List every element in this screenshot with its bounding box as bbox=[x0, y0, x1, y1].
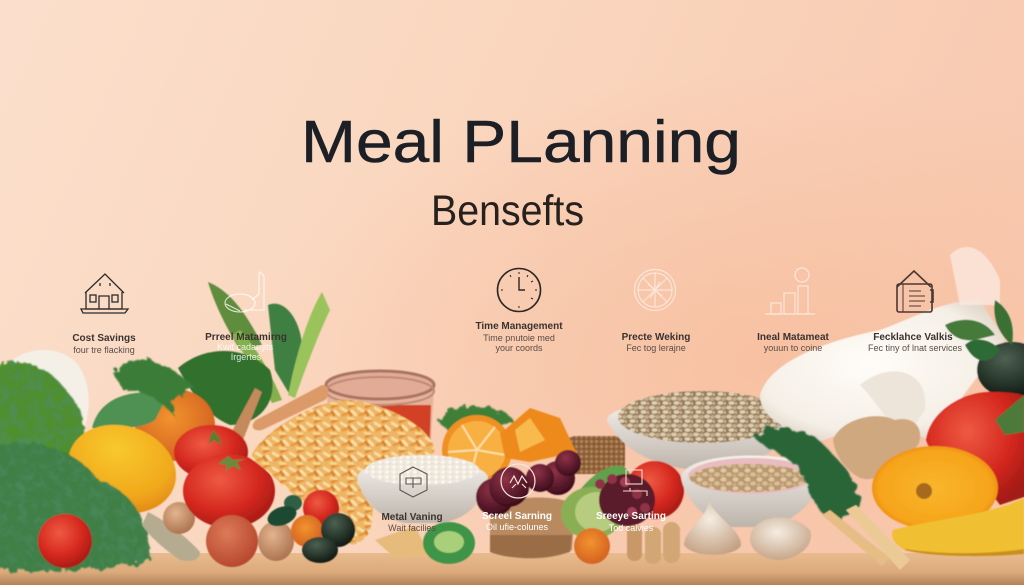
root bbox=[142, 512, 200, 561]
scattered pasta bbox=[375, 526, 430, 558]
egg front bbox=[258, 521, 294, 561]
label: Precte Weking bbox=[622, 332, 690, 353]
food: back-left greens and cabbage bbox=[0, 282, 434, 571]
small veg cluster bbox=[284, 495, 302, 511]
label: Cost Savings: four tre flacking bbox=[73, 345, 135, 355]
icon: circle on cherries bbox=[501, 464, 535, 498]
label: Ineal Matameat: Ineal Matameat bbox=[757, 332, 830, 343]
small orange bbox=[574, 528, 610, 564]
icon: bar chart bbox=[765, 268, 815, 314]
label: Time Management: Time Management bbox=[475, 321, 563, 332]
banana bbox=[892, 498, 1024, 556]
label: Ineal Matameat: youun to coine bbox=[764, 343, 822, 353]
green leaf behind bbox=[580, 466, 640, 510]
label: Screel Sarning: Oil ufie-colunes bbox=[486, 522, 549, 532]
white carrots bbox=[822, 510, 890, 566]
label: Precte Weking: Fec tog lerajne bbox=[626, 343, 686, 353]
big grain bowl bbox=[607, 391, 795, 470]
herbs bbox=[440, 407, 512, 435]
lentils bbox=[565, 436, 625, 474]
sack bbox=[760, 300, 1005, 441]
orange slice bbox=[442, 415, 512, 485]
front tomato bbox=[183, 454, 275, 528]
label: Precte Weking: Precte Weking bbox=[622, 332, 690, 343]
label: Prreel Matamirng: Prreel Matamirng bbox=[205, 332, 287, 343]
big tomato right bbox=[926, 392, 1024, 505]
leaf on orange bbox=[92, 393, 168, 428]
icon: food jar outline bbox=[225, 272, 264, 312]
bread bbox=[490, 498, 575, 558]
jar bbox=[325, 371, 434, 465]
icon: clock bbox=[498, 268, 540, 312]
lemon bbox=[56, 411, 188, 527]
label: Cost Savings: Cost Savings bbox=[72, 333, 136, 344]
egg bbox=[163, 502, 195, 534]
onion bbox=[750, 518, 811, 560]
green pepper bbox=[423, 522, 475, 564]
icon: monitor bbox=[623, 470, 647, 496]
label: Cost Savings bbox=[72, 333, 136, 355]
kale bbox=[0, 443, 150, 571]
cabbage bbox=[0, 350, 89, 430]
label: Prreel Matamirng bbox=[205, 332, 287, 362]
brick tomato bbox=[206, 515, 258, 567]
breadstick rear bbox=[230, 388, 262, 440]
label: Time Management bbox=[475, 321, 563, 353]
yellow orange bbox=[872, 446, 998, 530]
subtitle: Bensefts bbox=[431, 187, 584, 235]
parsnips bbox=[627, 525, 642, 561]
label: Metal Vaning: Metal Vaning bbox=[381, 512, 443, 523]
lettuce bbox=[0, 362, 84, 490]
small tomato left bbox=[38, 514, 92, 568]
label: Screel Sarning: Screel Sarning bbox=[482, 511, 552, 522]
celery and leaves bbox=[178, 282, 330, 425]
label: Sreeye Sarting: Sreeye Sarting bbox=[596, 511, 666, 522]
label: Metal Vaning: Wait facilies bbox=[388, 523, 436, 533]
icon: notebook bbox=[897, 271, 933, 312]
label: Prreel Matamirng: Irgertes bbox=[231, 352, 262, 362]
rice bowl bbox=[357, 455, 488, 523]
cherries bbox=[476, 478, 514, 516]
berries bbox=[599, 474, 655, 526]
icon: house bbox=[81, 274, 128, 313]
label: Fecklahce Valkis bbox=[868, 332, 963, 353]
leaves right bbox=[945, 320, 995, 340]
herb bbox=[752, 427, 860, 520]
food: pasta heap bbox=[250, 400, 435, 545]
green fig bbox=[561, 487, 623, 539]
garlic bbox=[684, 500, 741, 555]
label: Time Management: your coords bbox=[495, 343, 543, 353]
table bbox=[0, 553, 1024, 585]
icon: dial bbox=[634, 270, 676, 310]
label: Ineal Matameat bbox=[757, 332, 830, 353]
brown onion bbox=[833, 416, 920, 479]
food: right side bbox=[752, 247, 1024, 570]
label: Time Management: Time pnutoie med bbox=[483, 333, 555, 343]
rear tomato bbox=[174, 425, 248, 479]
icon: hexagon on bowl bbox=[400, 467, 427, 497]
avocado bbox=[977, 342, 1024, 398]
label: Screel Sarning bbox=[482, 511, 552, 532]
label: Fecklahce Valkis: Fecklahce Valkis bbox=[873, 332, 953, 343]
label: Metal Vaning bbox=[381, 512, 443, 533]
label: Fecklahce Valkis: Fec tiny of lnat services bbox=[868, 343, 963, 353]
title: Meal PLanning bbox=[301, 109, 741, 175]
orange chunk bbox=[500, 408, 576, 462]
orange behind bbox=[135, 389, 215, 461]
label: Sreeye Sarting: Tod calvies bbox=[609, 523, 654, 533]
red tomato bbox=[626, 461, 684, 519]
breadstick front bbox=[253, 385, 328, 430]
label: Prreel Matamirng: Kwit cadarrjits bbox=[217, 342, 274, 352]
food: centre items bbox=[265, 391, 821, 564]
pink bowl bbox=[681, 456, 821, 527]
label: Sreeye Sarting bbox=[596, 511, 666, 533]
